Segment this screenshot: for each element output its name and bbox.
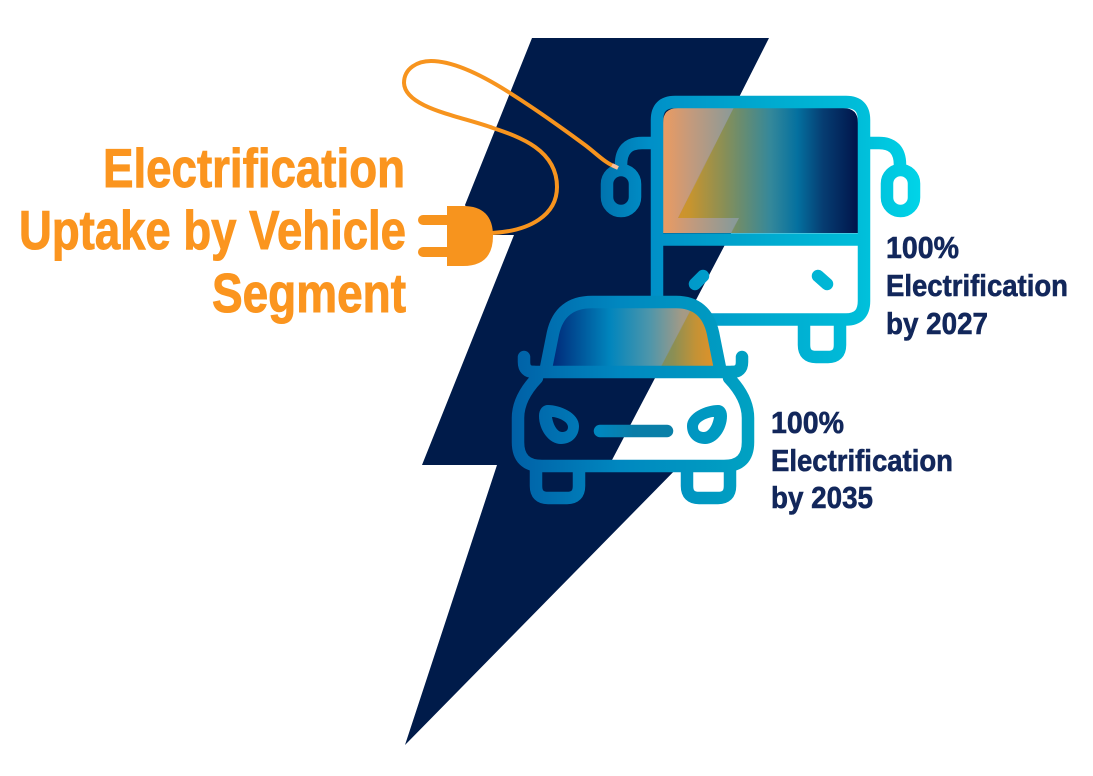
cable — [404, 61, 618, 233]
label: bus electrification: 100% — [886, 230, 959, 265]
icon: car — [518, 302, 748, 498]
title — [19, 137, 406, 324]
icon: bus — [607, 102, 914, 357]
car headlights — [539, 405, 727, 444]
label: car electrification: by 2035 — [771, 480, 873, 515]
car outline — [518, 302, 748, 498]
label: bus electrification: by 2027 — [886, 306, 988, 341]
title: Electrification — [103, 137, 405, 199]
icon: plug and cable — [404, 61, 618, 266]
label: car electrification — [771, 405, 953, 515]
bus outline — [607, 102, 914, 357]
label: bus electrification — [886, 230, 1068, 341]
title: Segment — [212, 262, 406, 324]
lightning bolt — [405, 38, 769, 745]
label: car electrification: Electrification — [771, 443, 953, 478]
label: car electrification: 100% — [771, 405, 844, 440]
label: bus electrification: Electrification — [886, 268, 1068, 303]
title: Uptake by Vehicle — [19, 199, 406, 261]
car windshield — [553, 308, 714, 366]
plug — [418, 206, 493, 266]
bus windshield — [663, 108, 858, 233]
